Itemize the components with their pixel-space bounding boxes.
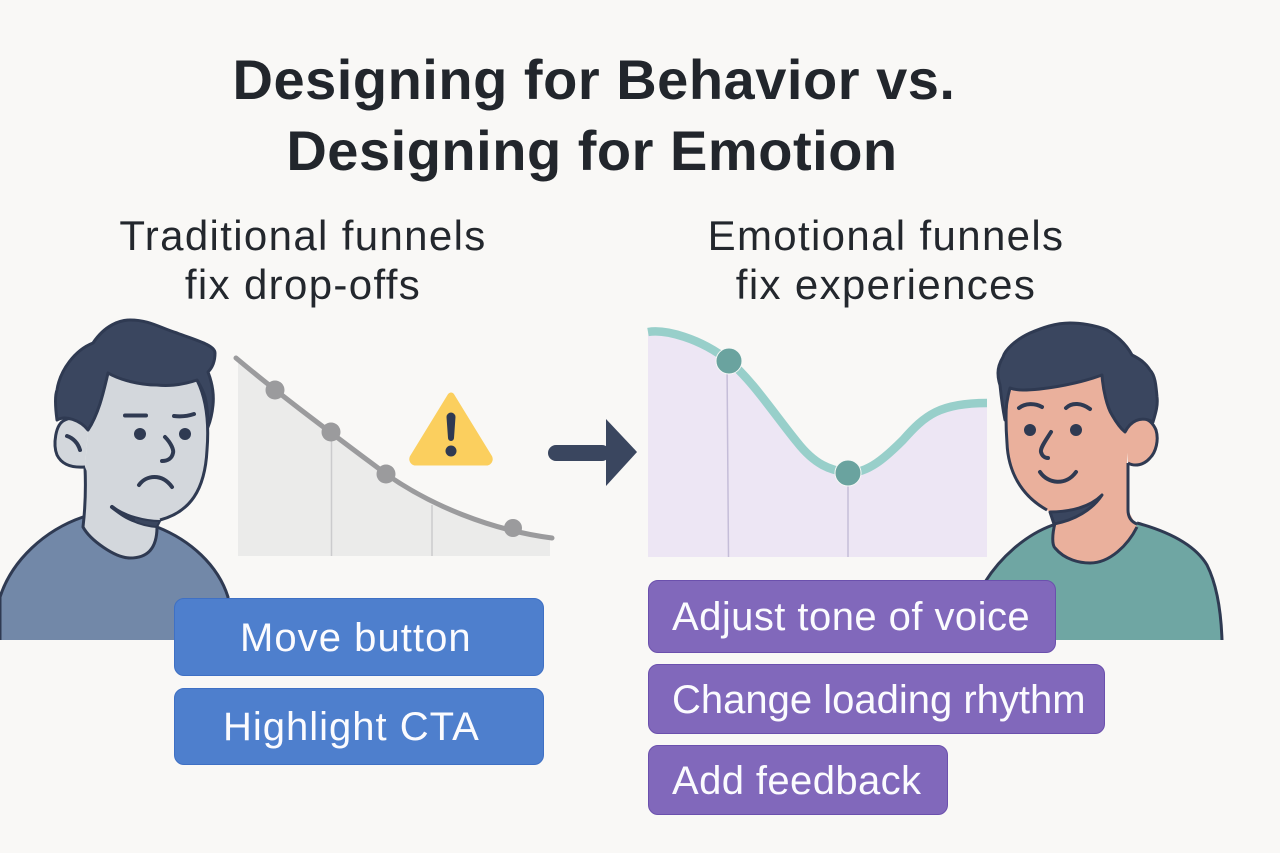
button: Move button — [174, 598, 544, 676]
left subtitle: Traditional funnels — [119, 212, 487, 259]
left subtitle: fix drop-offs — [185, 261, 421, 308]
button: Highlight CTA — [174, 688, 544, 765]
button: Move button: Move button — [240, 616, 472, 660]
left subtitle — [119, 212, 487, 308]
chart: drop-off funnel — [236, 358, 552, 556]
title — [232, 48, 956, 182]
title: Designing for Behavior vs. — [232, 48, 956, 111]
button: Adjust tone of voice: Adjust tone of voice — [672, 595, 1030, 639]
arrow — [548, 419, 637, 486]
icon: sad person — [0, 320, 228, 640]
right subtitle: Emotional funnels — [708, 212, 1064, 259]
button: Adjust tone of voice — [648, 580, 1056, 653]
icon: happy person — [985, 323, 1222, 640]
right subtitle — [708, 212, 1064, 308]
title: Designing for Emotion — [286, 119, 898, 182]
button: Change loading rhythm: Change loading rhythm — [672, 678, 1086, 722]
button: Highlight CTA: Highlight CTA — [223, 705, 480, 749]
right subtitle: fix experiences — [736, 261, 1036, 308]
button: Add feedback — [648, 745, 948, 815]
button: Add feedback: Add feedback — [672, 759, 921, 803]
button: Change loading rhythm — [648, 664, 1105, 734]
icon: warning triangle — [413, 396, 489, 462]
chart: emotional curve — [648, 331, 987, 557]
